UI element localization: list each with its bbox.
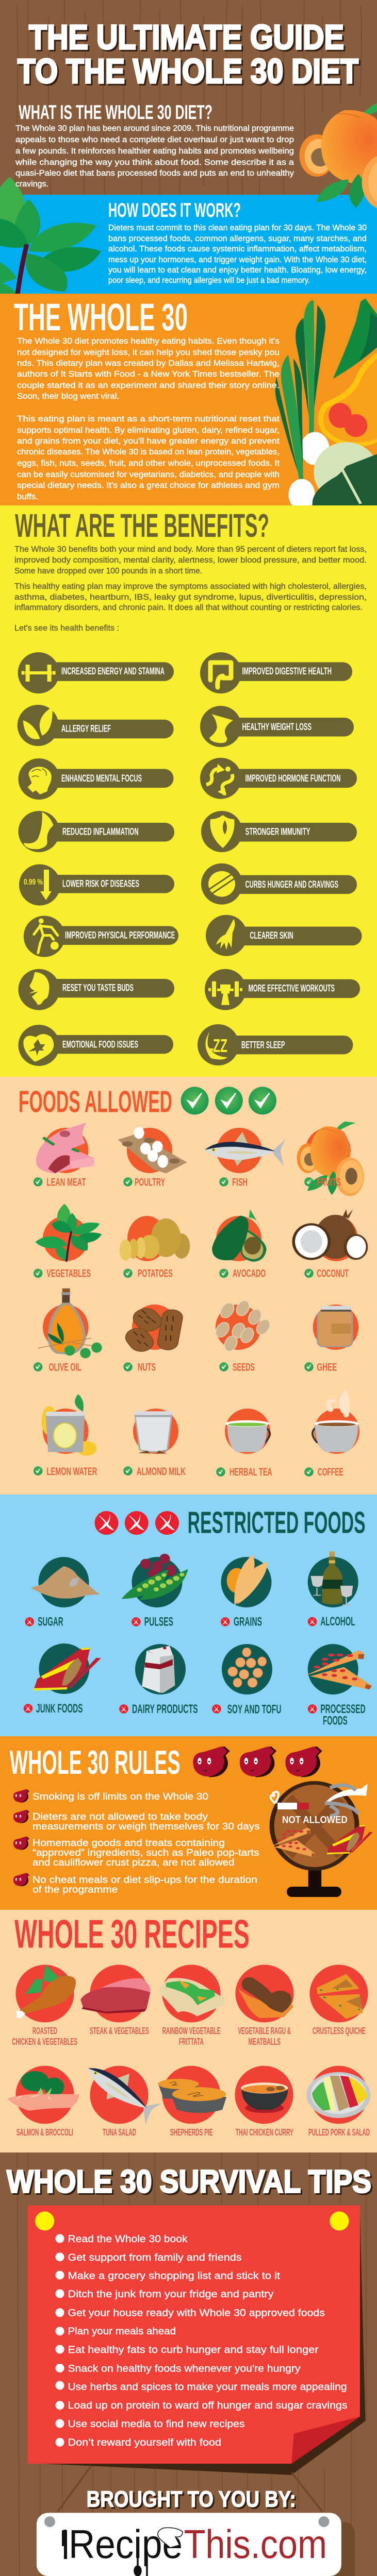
panel: yellow benefits background [0, 505, 377, 1077]
food: fish: FISH [232, 1176, 248, 1188]
food: lemon water [34, 1394, 97, 1478]
icon: hormone arrows [206, 764, 233, 796]
restricted: sugar: SUGAR [38, 1615, 63, 1629]
panel: brown intro background [0, 0, 377, 195]
panel: orange the whole 30 background [0, 294, 377, 505]
text block: benefits introduction: Some have dropped over 100 pounds in a short time. [14, 567, 202, 575]
icon: down arrow with percent: 0.99 % [24, 878, 43, 887]
recipe: steak and vegetables [80, 1978, 151, 2036]
icon: face profile [29, 972, 50, 1005]
benefit: healthy weight loss: HEALTHY WEIGHT LOSS [242, 722, 312, 733]
restricted: sugar [25, 1566, 100, 1629]
food: almond milk: ALMOND MILK [137, 1466, 186, 1478]
icon: dumbbell [22, 665, 56, 682]
benefit: clearer skin [206, 915, 362, 956]
panel: brown survival tips background [0, 2153, 377, 2576]
food circles: restricted foods backdrops [38, 1557, 358, 1694]
food: herbal tea: HERBAL TEA [230, 1466, 272, 1478]
restricted: processed foods: FOODS [323, 1714, 348, 1728]
food: ghee: GHEE [317, 1362, 337, 1374]
food: poultry [118, 1127, 187, 1188]
list: whole 30 rules: measurements or weigh themselves for 30 days [32, 1821, 260, 1832]
text block: what is the diet: while changing the way you think about food. Some describe it as a [15, 158, 294, 167]
benefit: enhanced mental focus [19, 758, 173, 800]
list: survival tips: Don’t reward yourself with food [68, 2437, 221, 2448]
benefit: improved physical performance [24, 916, 178, 957]
icon: weight machine [208, 981, 242, 1005]
list: survival tips: Get support from family and friends [68, 2252, 242, 2263]
logo text: this.com: This.com [184, 2521, 327, 2567]
benefit: more effective workouts [205, 969, 360, 1010]
text block: the whole 30 description [17, 337, 280, 501]
benefit: allergy relief [18, 705, 174, 746]
food: lemon water: LEMON WATER [46, 1466, 97, 1478]
list: whole 30 rules: and cauliflower crust pizza, are not allowed [32, 1857, 234, 1868]
list: whole 30 rules: “approved” ingredients, such as Paleo pop-tarts [32, 1848, 259, 1858]
food: potatoes [120, 1218, 190, 1280]
list: survival tips: Make a grocery shopping list and stick to it [68, 2270, 281, 2282]
benefit: allergy relief: ALLERGY RELIEF [61, 724, 111, 735]
icon: heart with plant [23, 1034, 54, 1062]
food: fruits [297, 1122, 364, 1196]
benefit: improved hormone function [200, 758, 357, 799]
icon: spoon and fork [135, 2555, 150, 2576]
restricted: pulses: PULSES [144, 1615, 173, 1629]
text block: benefits introduction: improved body composition, mental clarity, alertness, lower blood pressure, and better mood. [14, 556, 367, 565]
text block: the whole 30 description: not designed for weight loss, it can help you shed those pesky pou [17, 348, 280, 357]
icon: intestine [210, 663, 231, 687]
list: whole 30 rules: Dieters are not allowed to take body [32, 1811, 208, 1822]
food: almond milk [123, 1411, 186, 1478]
icon: leaves [23, 707, 53, 739]
text block: the whole 30 description: This eating plan is meant as a short-term nutritional reset that [17, 415, 280, 423]
text block: how it works: you will learn to eat clean and enjoy better health. Bloating, low energy, [108, 266, 367, 275]
restricted: junk foods: JUNK FOODS [36, 1702, 83, 1716]
benefit: reduced inflammation: REDUCED INFLAMMATION [62, 827, 138, 838]
icon: knife [62, 2530, 67, 2559]
benefit: enhanced mental focus: ENHANCED MENTAL FOCUS [61, 773, 142, 784]
text block: what is the diet: a few pounds. It reinforces healthier eating habits and promotes wellbeing [15, 147, 294, 156]
panel: orange rules background [0, 1736, 377, 1910]
list: survival tips: Use herbs and spices to make your meals more appealing [68, 2381, 347, 2393]
restricted: grains [221, 1554, 268, 1629]
recipe: vegetable ragu and meatballs [238, 1977, 293, 2047]
benefit: emotional food issues: EMOTIONAL FOOD ISSUES [62, 1040, 138, 1050]
benefit: increased energy and stamina: INCREASED ENERGY AND STAMINA [61, 666, 165, 677]
heading: how does it work: HOW DOES IT WORK? [108, 199, 241, 222]
restricted: soy and tofu [212, 1648, 282, 1717]
panel: light blue restricted foods background [0, 1495, 377, 1736]
text block: benefits introduction: This healthy eating plan may improve the symptoms associated with high cholesterol, allergies, [14, 582, 367, 591]
list: whole 30 rules: Homemade goods and treats containing [32, 1838, 225, 1848]
heading: foods allowed: FOODS ALLOWED [19, 1085, 172, 1119]
text block: the whole 30 description: special dietary needs. It's also a great choice for athletes and gym [17, 481, 280, 490]
text block: the whole 30 description: couple started it as an experiment and shared their story online. [17, 381, 280, 390]
food: seeds [214, 1299, 272, 1374]
benefit: healthy weight loss [200, 706, 354, 747]
list: survival tips: Snack on healthy foods whenever you're hungry [68, 2363, 301, 2374]
heading: the whole 30: THE WHOLE 30 [14, 296, 188, 338]
text block: benefits introduction [14, 545, 367, 633]
text block: benefits introduction: Let's see its health benefits : [14, 624, 119, 633]
restricted: soy and tofu: SOY AND TOFU [227, 1703, 282, 1717]
recipe: tuna salad [79, 2053, 166, 2138]
text block: what is the diet: The Whole 30 plan has been around since 2009. This nutritional programme [15, 124, 294, 133]
recipe: rainbow vegetable frittata: FRITTATA [179, 2037, 204, 2047]
text block: what is the diet: cravings. [15, 180, 48, 189]
icon: sleeping z letters and moon: z [208, 1044, 214, 1058]
icon: leg [24, 812, 54, 849]
list: survival tips: Load up on protein to ward off hunger and sugar cravings [68, 2400, 348, 2411]
icon: footballer [34, 918, 59, 953]
recipe: thai chicken curry: THAI CHICKEN CURRY [236, 2127, 293, 2138]
restricted: grains: GRAINS [234, 1615, 262, 1629]
food: ghee [304, 1306, 353, 1374]
list: survival tips: Plan your meals ahead [68, 2326, 176, 2337]
text block: what is the diet: quasi-Paleo diet that bans processed foods and puts an end to unhealthy [15, 169, 294, 178]
benefit: clearer skin: CLEARER SKIN [250, 930, 293, 941]
food: poultry: POULTRY [135, 1176, 165, 1188]
text block: how it works: alcohol. These foods cause systemic inflammation, affect metabolism, [108, 245, 367, 253]
food: olive oil [34, 1289, 102, 1374]
benefit: improved digestive health [200, 652, 352, 693]
benefit: lower risk of diseases: LOWER RISK OF DISEASES [62, 878, 139, 889]
benefit: curbs hunger and cravings [201, 863, 357, 905]
recipe: rainbow vegetable frittata [159, 1978, 225, 2047]
benefit: reset your taste buds: RESET YOU TASTE BUDS [62, 983, 134, 994]
recipe: salmon and broccoli [7, 2071, 79, 2138]
restricted: junk foods [24, 1647, 101, 1716]
food: coconut [292, 1209, 368, 1280]
food: vegetables: VEGETABLES [46, 1268, 91, 1280]
benefit: better sleep [198, 1024, 353, 1065]
icon: sleeping z letters and moon [205, 1031, 227, 1060]
food: coffee: COFFEE [318, 1466, 343, 1478]
text block: what is the diet: appeals to those who need a complete diet overhaul or just want to drop [15, 135, 294, 144]
panel: red survival tips note [28, 2206, 366, 2475]
text block: the whole 30 description: eggs, fish, nuts, seeds, fruit, and other whole, unprocessed foods. It [17, 459, 280, 468]
icon: grey pins [44, 2516, 329, 2527]
text block: benefits introduction: inflammatory disorders, and chronic pain. It does all that without counting or restricting calories. [14, 603, 363, 612]
benefit: reduced inflammation [19, 811, 174, 852]
food: coconut: COCONUT [317, 1268, 349, 1280]
panel: blue how it works background [0, 195, 377, 294]
icon: not allowed sign: NOT ALLOWED [282, 1815, 348, 1826]
restricted: pulses [121, 1554, 188, 1629]
text block: how it works: mess up your hormones, and trigger weight gain. With the Whole 30 diet, [108, 256, 367, 264]
heading: what is the whole 30 diet: WHAT IS THE WHOLE 30 DIET? [19, 101, 212, 124]
title [18, 18, 358, 91]
icon: three whistles [193, 1747, 322, 1777]
recipe: vegetable ragu and meatballs: VEGETABLE RAGU & [238, 2026, 291, 2036]
benefit: increased energy and stamina [18, 652, 174, 693]
food: vegetables [34, 1204, 102, 1280]
logo text: Recipe [69, 2521, 183, 2567]
icon: chef hat [158, 2528, 183, 2548]
food: lean meat: LEAN MEAT [46, 1176, 86, 1188]
recipe: steak and vegetables: STEAK & VEGETABLES [90, 2026, 149, 2036]
food: coffee [304, 1394, 359, 1478]
text block: how it works: Dieters must commit to this clean eating plan for 30 days. The Whole 30 [108, 224, 367, 232]
icon: yellow pins [35, 2211, 349, 2231]
food: avocado [212, 1209, 267, 1280]
restricted: dairy products [119, 1646, 198, 1716]
icon: apricots illustration [299, 103, 377, 210]
panel: logo sign [37, 2513, 355, 2576]
text block: what is the diet [15, 124, 294, 189]
recipe: pulled pork and salad [306, 2072, 370, 2138]
list: survival tips [56, 2233, 348, 2448]
icon: head and brain [28, 767, 52, 794]
text block: how it works: bans processed foods, common allergens, sugar, many starches, and [108, 234, 367, 243]
icon: not allowed sign [270, 1781, 373, 1897]
text block: the whole 30 description: and grains from your diet, you'll have greater energy and prevent [17, 437, 280, 446]
recipe: shepherds pie: SHEPHERDS PIE [170, 2127, 213, 2138]
icon: green herb illustration [0, 177, 101, 319]
text block: benefits introduction: The Whole 30 benefits both your mind and body. More than 95 percent of dieters report fat loss, [14, 545, 367, 554]
icon: three green checks [181, 1087, 276, 1114]
heading: brought to you by: BROUGHT TO YOU BY: [87, 2487, 296, 2512]
list: whole 30 rules: Smoking is off limits on the Whole 30 [32, 1791, 208, 1802]
recipe: salmon and broccoli: SALMON & BROCCOLI [17, 2127, 73, 2138]
icon: waist [209, 714, 233, 743]
text block: the whole 30 description: can be easily customised for vegetarians, diabetics, and people with [17, 470, 280, 479]
icon: pill [206, 871, 237, 897]
text block: how it works [108, 224, 367, 285]
list: survival tips: Eat healthy fats to curb hunger and stay full longer [68, 2344, 319, 2355]
recipe: roasted chicken and vegetables [12, 1965, 77, 2047]
text block: the whole 30 description: chronic diseases. The Whole 30 is based on lean protein, vegetables, [17, 448, 280, 456]
restricted: processed foods [305, 1651, 372, 1728]
food: nuts: NUTS [138, 1362, 156, 1374]
list: survival tips: Ditch the junk from your fridge and pantry [68, 2289, 274, 2300]
recipe: rainbow vegetable frittata: RAINBOW VEGETABLE [162, 2026, 221, 2036]
recipe: crustless quiche [313, 1974, 366, 2036]
food: olive oil: OLIVE OIL [49, 1362, 81, 1374]
icon: down arrow with percent [24, 870, 52, 900]
food: potatoes: POTATOES [138, 1268, 173, 1280]
food: herbal tea [216, 1420, 272, 1478]
text block: the whole 30 description: authors of It Starts with Food - a New York Times bestseller. The [17, 370, 280, 379]
recipe: roasted chicken and vegetables: ROASTED [32, 2026, 57, 2036]
list: survival tips: Read the Whole 30 book [68, 2233, 188, 2245]
benefit: emotional food issues [19, 1025, 173, 1066]
heading: whole 30 rules: WHOLE 30 RULES [10, 1743, 181, 1781]
icon: hanging strings [58, 2466, 322, 2512]
list: whole 30 rules: of the programme [32, 1885, 118, 1895]
list: survival tips: Use social media to find new recipes [68, 2418, 245, 2430]
recipe: thai chicken curry [236, 2082, 293, 2138]
restricted: alcohol [308, 1551, 355, 1629]
text block: the whole 30 description: buffs. [17, 493, 38, 501]
text block: how it works: poor sleep, and recurring allergies will be just a bad memory. [108, 276, 310, 285]
food: fruits: FRUITS [317, 1176, 341, 1188]
food: seeds: SEEDS [233, 1362, 255, 1374]
recipe: vegetable ragu and meatballs: MEATBALLS [249, 2037, 281, 2047]
icon: shield with leaf [210, 815, 235, 848]
food circles: recipes backdrops [15, 1965, 368, 2124]
icon: vegetables illustration [275, 299, 377, 510]
benefit: improved physical performance: IMPROVED PHYSICAL PERFORMANCE [65, 930, 175, 941]
benefit: stronger immunity [201, 811, 357, 852]
benefit: better sleep: BETTER SLEEP [241, 1040, 285, 1051]
text block: benefits introduction: asthma, diabetes, heartburn, IBS, leaky gut syndrome, lupus, diverticulitis, depression, [14, 593, 367, 602]
recipe: roasted chicken and vegetables: CHICKEN & VEGETABLES [12, 2037, 77, 2047]
recipe: shepherds pie [158, 2079, 226, 2138]
food: nuts [121, 1305, 184, 1374]
food: fish [205, 1132, 286, 1188]
recipe: tuna salad: TUNA SALAD [103, 2127, 136, 2138]
panel: peach recipes background [0, 1910, 377, 2153]
text block: the whole 30 description: nds. This dietary plan was created by Dallas and Melissa Hartwig, [17, 359, 280, 368]
list: survival tips: Get your house ready with Whole 30 approved foods [68, 2307, 325, 2318]
text block: the whole 30 description: Soon, their blog went viral. [17, 392, 119, 401]
food: avocado: AVOCADO [233, 1268, 266, 1280]
benefit: reset your taste buds [19, 969, 174, 1010]
text block: the whole 30 description: supports optimal health. By eliminating gluten, dairy, refined sugar, [17, 426, 280, 435]
restricted: dairy products: DAIRY PRODUCTS [132, 1702, 198, 1716]
list: whole 30 rules [13, 1789, 259, 1895]
food circles: allowed foods backdrops [43, 1128, 359, 1454]
food: lean meat [34, 1123, 94, 1188]
text block: the whole 30 description: The Whole 30 diet promotes healthy eating habits. Even though it's [17, 337, 280, 346]
benefit: lower risk of diseases [19, 865, 174, 906]
icon: three red x marks [95, 1511, 179, 1535]
icon: hand and arm [216, 919, 235, 950]
benefit: stronger immunity: STRONGER IMMUNITY [245, 827, 310, 838]
list: whole 30 rules: No cheat meals or diet slip-ups for the duration [32, 1875, 257, 1885]
panel: peach foods allowed background [0, 1077, 377, 1495]
icon: sleeping z letters and moon: ZZ [213, 1035, 227, 1056]
